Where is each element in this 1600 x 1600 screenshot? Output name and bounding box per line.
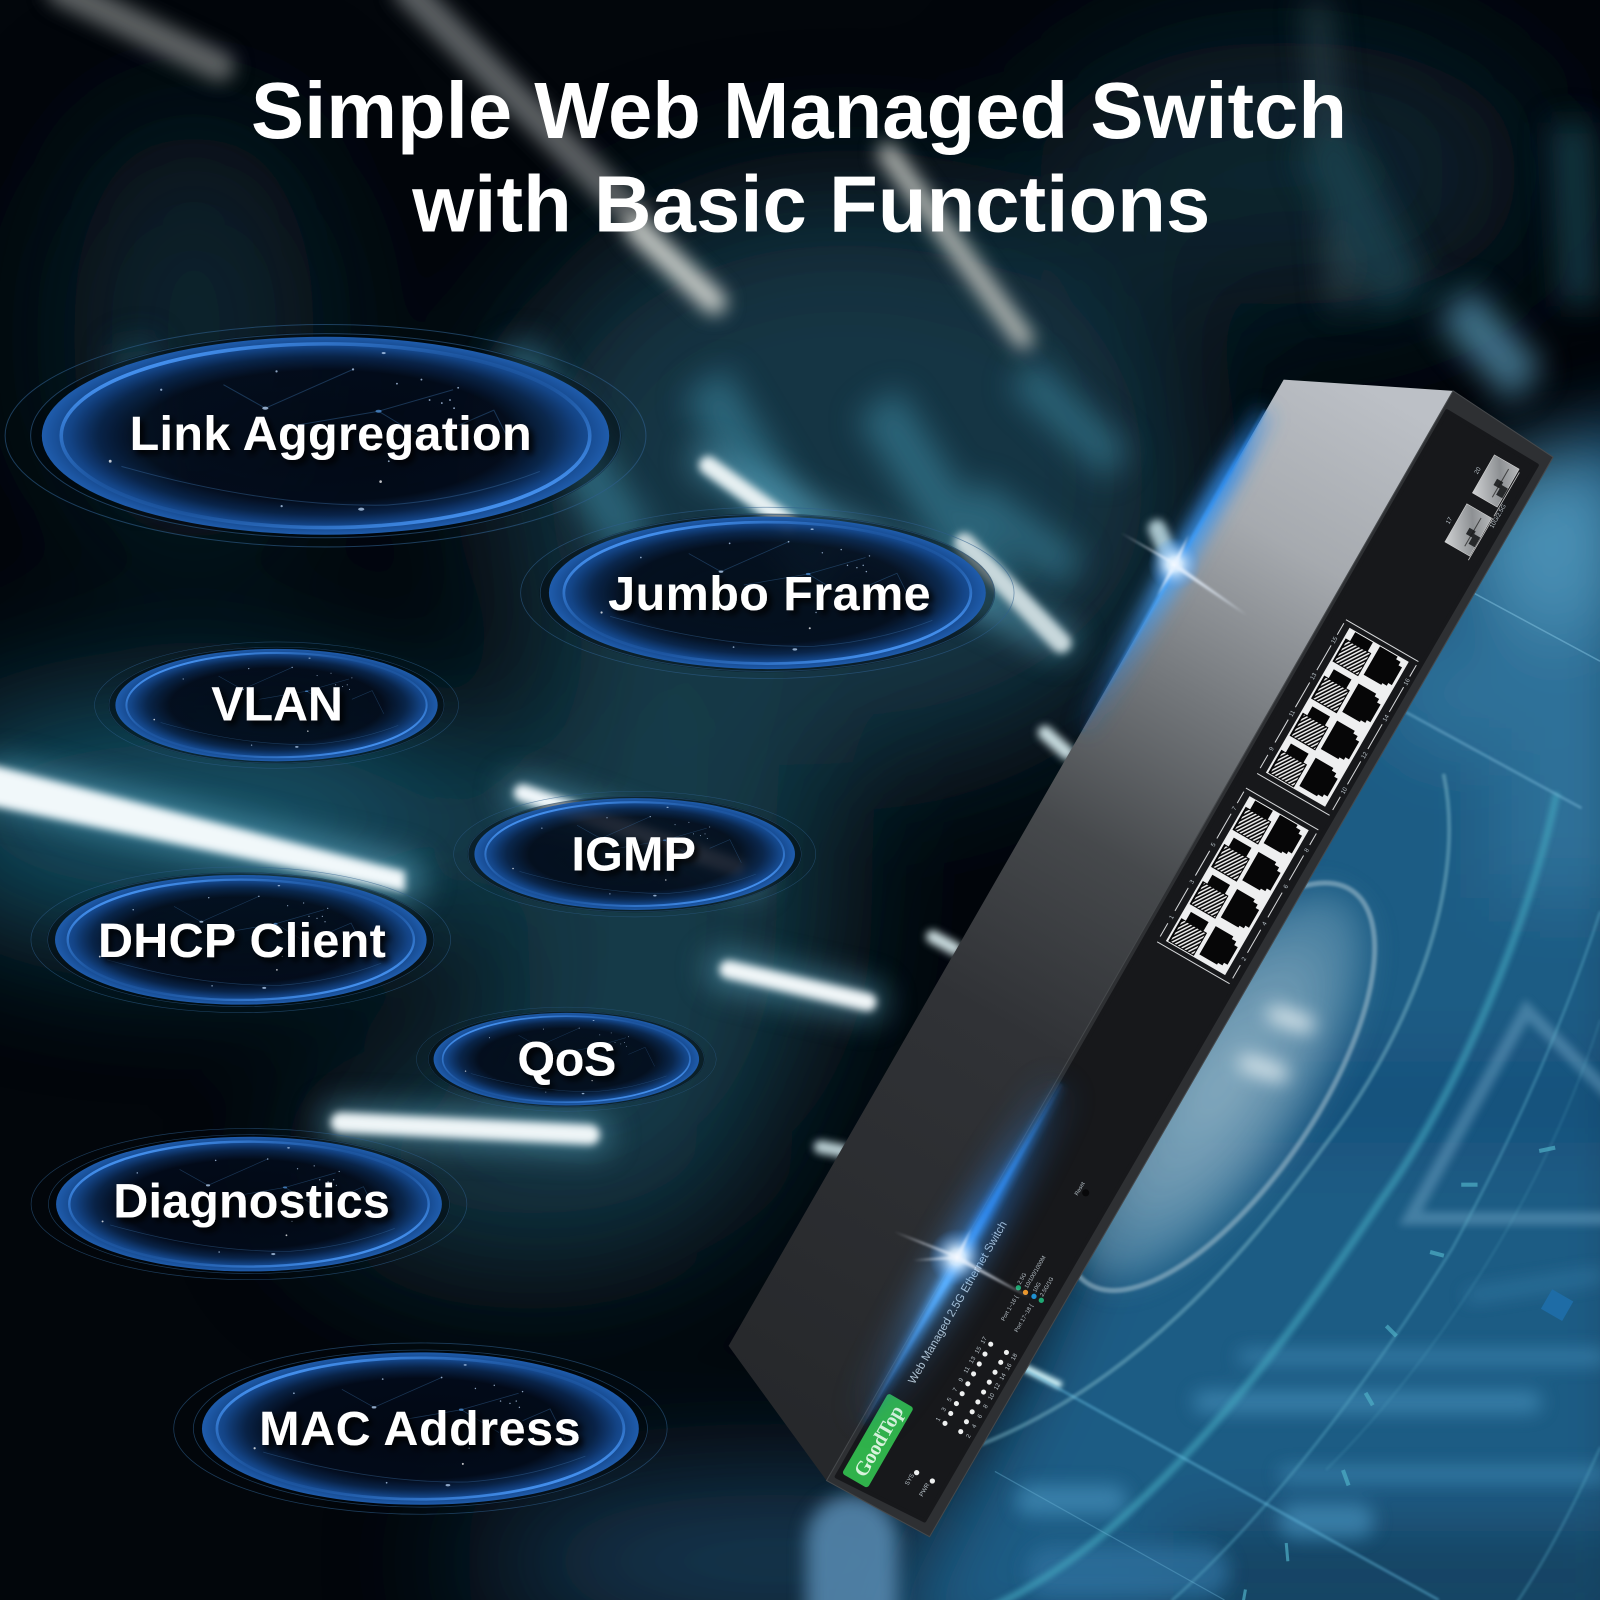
title line 1: Simple Web Managed Switch — [251, 66, 1347, 155]
background: tilted triangle outline — [1410, 1010, 1600, 1218]
port leds: 11 — [962, 1365, 972, 1375]
port leds: 1 — [935, 1416, 943, 1423]
led legend — [1001, 1255, 1056, 1334]
background: small square — [1541, 1289, 1573, 1321]
background: glowing oval — [1006, 836, 1433, 1338]
led legend: Port 1~16 { — [1001, 1295, 1020, 1322]
port block 9-16: 16 — [1402, 677, 1412, 687]
port block 9-16: 11 — [1288, 709, 1297, 718]
bubble: MAC Address: MAC Address — [259, 1402, 581, 1456]
led legend: 2.5G/1G — [1039, 1276, 1056, 1298]
background: light rays — [995, 592, 1600, 1600]
background: white light streaks — [0, 465, 1180, 1151]
port block 1-8: 5 — [1210, 841, 1218, 848]
bubble: Link Aggregation — [5, 324, 646, 547]
product name: Web Managed 2.5G Ethernet Switch — [906, 1219, 1010, 1386]
port leds: 3 — [940, 1406, 948, 1413]
port block 9-16: 12 — [1360, 750, 1370, 760]
port block 9-16: 14 — [1381, 713, 1391, 723]
port leds: 4 — [971, 1423, 979, 1430]
logo: GoodTop: GoodTop — [850, 1402, 908, 1481]
switch front panel — [837, 411, 1537, 1520]
reset button: Reset — [1074, 1181, 1087, 1197]
port block 9-16: 15 — [1330, 635, 1340, 645]
port leds: 6 — [976, 1413, 984, 1420]
port leds: 10 — [987, 1391, 997, 1401]
bubble: IGMP: IGMP — [571, 827, 696, 881]
bubble: IGMP — [454, 791, 816, 917]
bubble: Jumbo Frame — [521, 507, 1014, 678]
port block 9-16: 9 — [1268, 745, 1276, 752]
port block 1-8: 7 — [1231, 805, 1239, 812]
port leds: 9 — [957, 1376, 965, 1383]
port leds: 14 — [998, 1372, 1008, 1382]
background: concentric arcs — [969, 776, 1600, 1600]
logo: GoodTop — [842, 1393, 914, 1488]
bubble: Link Aggregation: Link Aggregation — [130, 407, 532, 461]
sfp labels: 20 — [1473, 466, 1483, 475]
port leds: 5 — [946, 1396, 954, 1403]
port block 1-8: 8 — [1303, 847, 1311, 854]
background: horizontal light bands — [852, 1276, 1600, 1600]
port block 9-16: 13 — [1309, 671, 1319, 681]
port leds: 16 — [1004, 1362, 1014, 1372]
background: soft glow behind streaks — [0, 461, 1061, 1135]
port block 9-16: 10 — [1340, 786, 1349, 796]
port block 9-16 — [1255, 618, 1422, 817]
background: floating fragments — [1240, 1146, 1556, 1600]
port block 1-8: 1 — [1168, 914, 1176, 921]
bubble: Diagnostics: Diagnostics — [113, 1174, 390, 1228]
port block 1-8: 4 — [1261, 920, 1269, 927]
bubble: VLAN — [95, 642, 459, 768]
port block 1-8: 2 — [1240, 955, 1249, 962]
port leds: 12 — [993, 1382, 1002, 1391]
bubble: VLAN: VLAN — [211, 677, 343, 731]
status leds: SYS — [904, 1473, 916, 1487]
led legend: Port 17~18 { — [1014, 1303, 1035, 1334]
bubble: MAC Address — [174, 1343, 667, 1514]
port leds: 15 — [974, 1345, 983, 1355]
network switch — [729, 380, 1553, 1537]
led legend: 10/100/1000M — [1024, 1255, 1048, 1290]
port block 1-8 — [1155, 787, 1322, 986]
port block 1-8: 6 — [1282, 883, 1290, 890]
sfp port 20 — [1472, 455, 1519, 507]
switch front frame — [827, 391, 1553, 1537]
bubble: Diagnostics — [31, 1128, 467, 1280]
light streak with star, upper — [1082, 410, 1265, 733]
title line 2: with Basic Functions — [411, 160, 1210, 249]
title — [251, 66, 1347, 249]
bubble: QoS: QoS — [517, 1033, 616, 1087]
led legend: 2.5G — [1017, 1271, 1029, 1286]
background: grey ceiling streaks — [61, 0, 1023, 339]
status leds: PWR — [918, 1482, 932, 1498]
bubble: DHCP Client: DHCP Client — [98, 914, 386, 968]
status leds — [904, 1470, 935, 1498]
port leds: 2 — [965, 1433, 973, 1440]
switch top face — [729, 380, 1453, 1481]
bubble: Jumbo Frame: Jumbo Frame — [608, 567, 931, 621]
port leds: 13 — [968, 1355, 978, 1365]
sfp labels: 17 — [1445, 516, 1454, 525]
port block 1-8: 3 — [1188, 878, 1196, 885]
led legend: 10G — [1032, 1281, 1043, 1294]
bubble: QoS — [416, 1007, 716, 1111]
background: blue lower-right field — [878, 408, 1600, 1600]
port leds: 7 — [952, 1386, 960, 1393]
bubble: DHCP Client — [31, 867, 451, 1013]
light streak with star, lower — [863, 1084, 1061, 1424]
port leds: 17 — [979, 1335, 989, 1345]
port leds — [934, 1335, 1020, 1441]
port leds: 8 — [982, 1403, 990, 1410]
sfp port 17 — [1445, 504, 1492, 556]
port leds: 18 — [1010, 1352, 1020, 1362]
sfp labels: 10G/2.5G — [1489, 503, 1508, 530]
sfp labels — [1445, 466, 1519, 560]
background: blurred teal blocks — [112, 0, 1600, 612]
